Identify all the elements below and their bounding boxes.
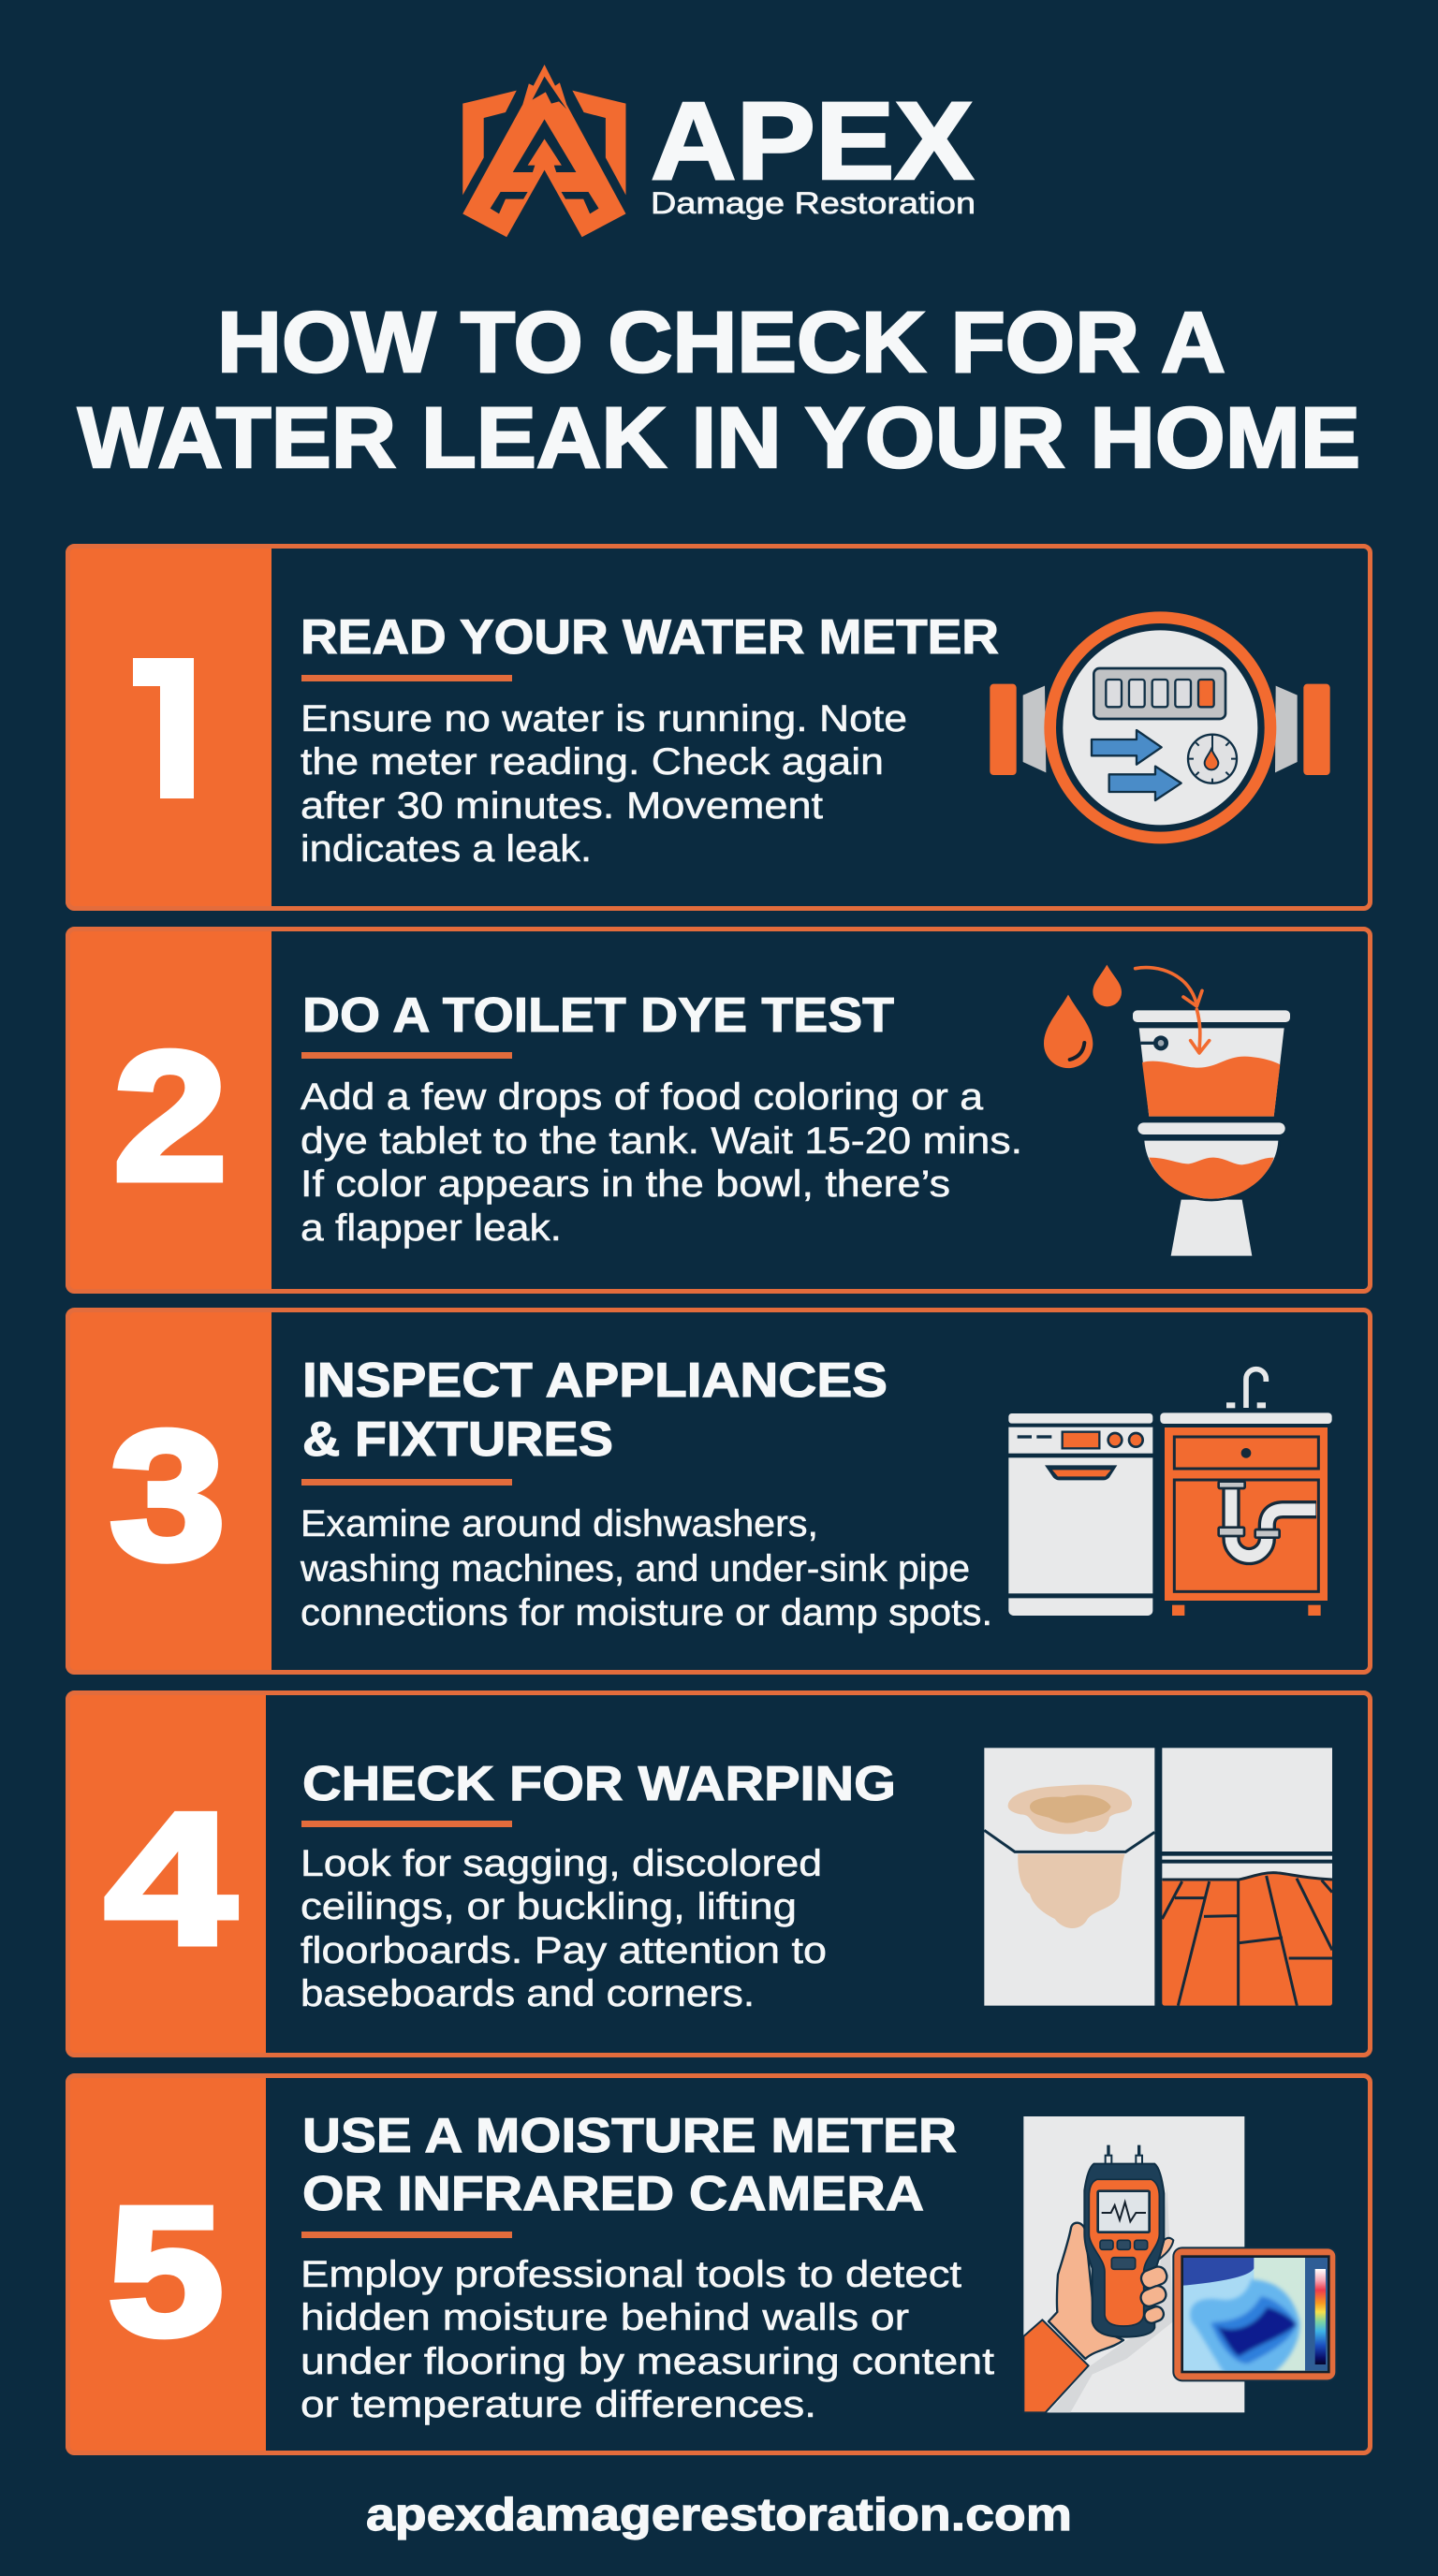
body text: under flooring by measuring content <box>301 2341 994 2382</box>
icon: dishwasher and sink cabinet <box>1008 1369 1332 1616</box>
brand name: APEX <box>651 80 974 203</box>
body text: connections for moisture or damp spots. <box>301 1592 992 1633</box>
heading: OR INFRARED CAMERA <box>302 2167 924 2221</box>
heading <box>302 1354 888 1467</box>
dishwasher <box>1008 1413 1152 1616</box>
body text: a flapper leak. <box>301 1208 562 1249</box>
body text: indicates a leak. <box>301 828 592 870</box>
body text <box>301 2254 994 2425</box>
body text: after 30 minutes. Movement <box>301 785 823 827</box>
body text: If color appears in the bowl, there’s <box>301 1164 950 1205</box>
heading: CHECK FOR WARPING <box>302 1757 896 1811</box>
number 3: 3 <box>110 1393 226 1598</box>
brand tagline: Damage Restoration <box>651 186 976 220</box>
panel: step 2 toilet dye test <box>66 929 1371 1292</box>
heading: USE A MOISTURE METER <box>302 2109 957 2163</box>
number 5: 5 <box>108 2169 224 2374</box>
moisture meter <box>1084 2145 1164 2337</box>
body text <box>301 1076 1022 1249</box>
fingers <box>1138 2264 1169 2325</box>
body text: the meter reading. Check again <box>301 741 884 783</box>
body text: Ensure no water is running. Note <box>301 698 907 739</box>
title: HOW TO CHECK FOR A <box>217 295 1225 390</box>
body text: floorboards. Pay attention to <box>301 1930 827 1971</box>
panel: step 1 read your water meter <box>66 546 1371 909</box>
footer website: apexdamagerestoration.com <box>366 2490 1072 2540</box>
logo: Apex Damage Restoration <box>462 65 976 237</box>
icon: mountain A shield <box>462 65 625 237</box>
body text: Employ professional tools to detect <box>301 2254 961 2295</box>
body text: hidden moisture behind walls or <box>301 2297 909 2338</box>
body text: or temperature differences. <box>301 2384 816 2425</box>
number 2: 2 <box>113 1014 227 1219</box>
heading <box>302 2109 957 2221</box>
body text: dye tablet to the tank. Wait 15-20 mins. <box>301 1120 1022 1162</box>
body text <box>300 1503 992 1633</box>
body text <box>301 1843 827 2014</box>
icon: toilet and dye drops <box>1044 965 1290 1256</box>
heading: INSPECT APPLIANCES <box>302 1354 888 1408</box>
number 4: 4 <box>105 1775 236 1983</box>
ceiling stain <box>984 1748 1154 2006</box>
number 1: 1 <box>126 633 197 838</box>
shadow <box>1049 2188 1173 2412</box>
panel: step 5 moisture meter or infrared camera <box>66 2075 1371 2453</box>
body text: baseboards and corners. <box>301 1973 755 2014</box>
heading: & FIXTURES <box>302 1412 613 1467</box>
number 1 <box>133 658 194 798</box>
title <box>78 295 1360 486</box>
title: WATER LEAK IN YOUR HOME <box>78 390 1360 486</box>
warped floorboards <box>1162 1748 1332 2006</box>
body text: ceilings, or buckling, lifting <box>301 1886 797 1927</box>
panel: step 4 check for warping <box>66 1692 1371 2056</box>
body text: washing machines, and under-sink pipe <box>300 1548 970 1589</box>
sink cabinet <box>1160 1369 1332 1616</box>
panel: step 3 inspect appliances and fixtures <box>66 1310 1371 1673</box>
thermal display <box>1173 2247 1336 2380</box>
icon: stained ceiling and warped floor <box>984 1748 1332 2006</box>
body text: Add a few drops of food coloring or a <box>301 1076 984 1118</box>
heading: READ YOUR WATER METER <box>301 610 999 665</box>
body text: Examine around dishwashers, <box>301 1503 818 1544</box>
body text <box>301 698 907 870</box>
icon: water meter <box>990 611 1330 843</box>
icon: moisture meter in hand and thermal display <box>1023 2116 1336 2412</box>
body text: Look for sagging, discolored <box>301 1843 822 1884</box>
heading: DO A TOILET DYE TEST <box>302 988 894 1043</box>
hand <box>1023 2223 1173 2412</box>
